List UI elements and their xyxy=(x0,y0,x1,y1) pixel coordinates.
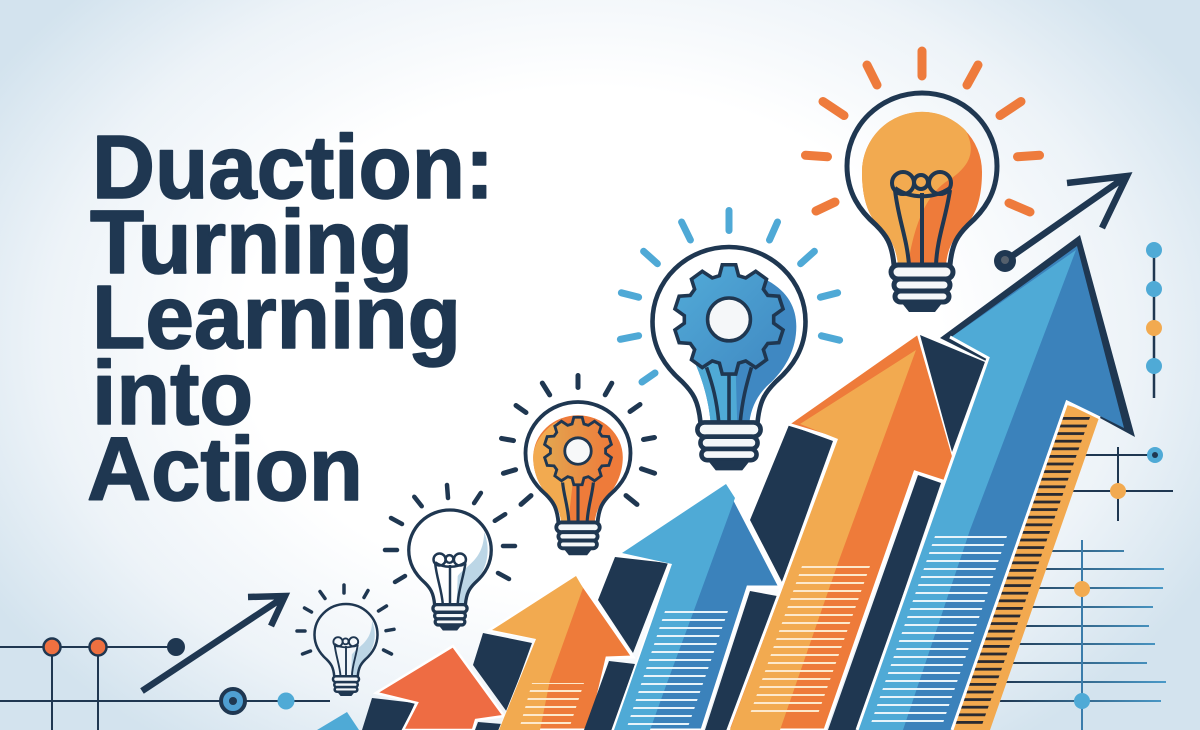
connector lines right side xyxy=(1030,242,1173,521)
icon: large orange bulb xyxy=(806,51,1040,312)
title xyxy=(87,118,494,520)
arrow: orange step xyxy=(473,575,635,730)
arrow: red step xyxy=(362,646,504,730)
arrow: small growth arrow lower left xyxy=(142,596,285,691)
arrow: navy block behind main arrow xyxy=(920,335,985,452)
chart lines lower right xyxy=(1000,540,1166,730)
arrow: blue step xyxy=(598,483,780,730)
title: Turning xyxy=(90,193,413,293)
icon: outline bulb xyxy=(385,485,515,630)
network lines lower left xyxy=(0,638,330,730)
title: Duaction: xyxy=(92,118,494,218)
title: Learning xyxy=(92,268,461,368)
arrow: main blue xyxy=(857,235,1135,730)
icon: blue gear bulb xyxy=(620,210,840,470)
arrow: upper growth arrow with node xyxy=(994,176,1127,272)
hatched orange strip xyxy=(953,405,1100,730)
icon: orange gear bulb xyxy=(502,376,655,555)
title: into xyxy=(92,344,253,444)
title: Action xyxy=(87,420,363,520)
icon: small outline bulb xyxy=(297,585,394,696)
arrow: large orange xyxy=(728,333,954,730)
arrow: small blue base arrow xyxy=(317,712,359,730)
